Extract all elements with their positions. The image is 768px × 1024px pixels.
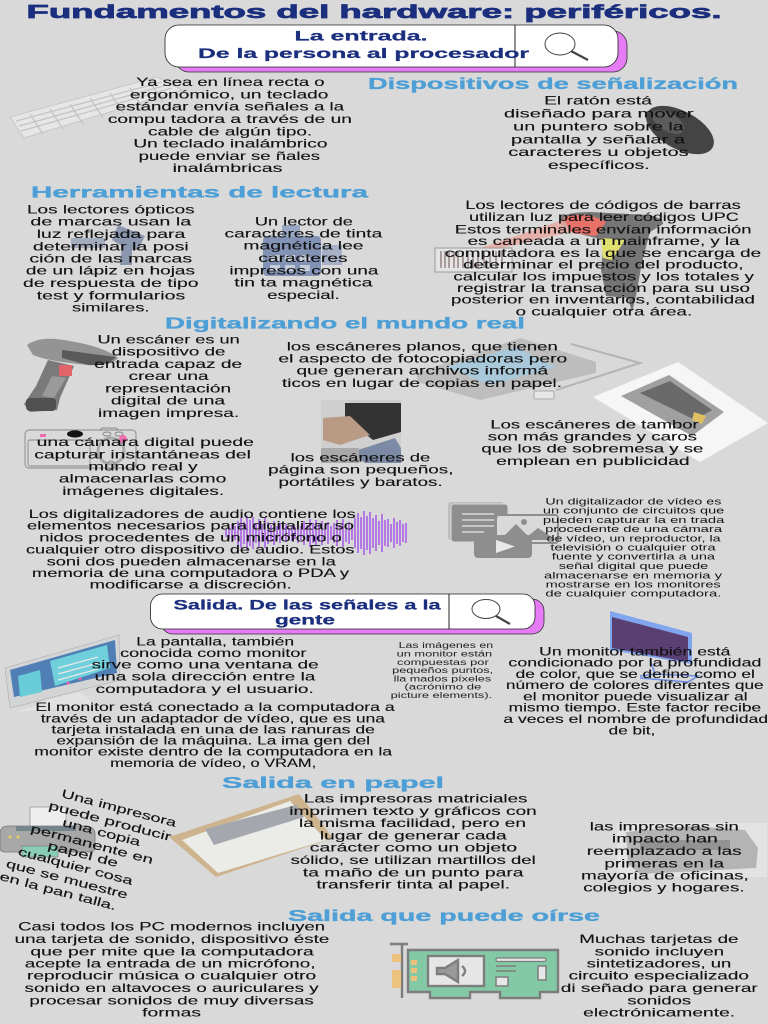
- text: teclado: puede enviar se ñales: [139, 149, 320, 163]
- text: impresora, rotated: papel de: [46, 838, 120, 870]
- text: impresoras matriciales: imprimen texto y gráficos con: [289, 804, 537, 818]
- text: lector de tinta magnética: magnética lee: [243, 239, 364, 253]
- text: digitalizador de vídeo: señal digital que puede: [559, 561, 708, 571]
- text: impresora, rotated: [0, 786, 178, 913]
- text: pantalla: sirve como una ventana de: [92, 657, 319, 671]
- text: impresoras matriciales: ta maño de un punto para: [303, 865, 524, 879]
- text: escáner: dispositivo de: [112, 345, 226, 359]
- text: impresoras sin impacto: las impresoras sin: [590, 819, 739, 833]
- text: digitalizador de vídeo: de vídeo, un reproductor, la: [547, 533, 722, 543]
- text: tarjeta de sonido: que per mite que la computadora: [30, 944, 314, 958]
- image: mouse: [638, 96, 722, 164]
- icon: magnifier: [472, 600, 510, 624]
- text: escáneres planos: los escáneres planos, que tienen: [287, 339, 558, 353]
- text: monitor conectado: monitor existe dentro de la computadora en la: [34, 745, 393, 759]
- image: barcode scanner: [435, 212, 663, 312]
- text: digitalizador de vídeo: televisión o cualquier otra: [550, 542, 717, 552]
- text: lector de tinta magnética: caracteres: [258, 251, 348, 265]
- text: profundidad de color: [503, 644, 768, 737]
- text: ratón: caracteres u objetos: [508, 145, 689, 159]
- text: píxeles: Las imágenes en: [399, 641, 493, 650]
- text: digitalizador de vídeo: [543, 496, 726, 599]
- text: escáner: representación: [105, 381, 231, 395]
- text: tarjeta de sonido: Casi todos los PC modernos incluyen: [18, 920, 325, 934]
- text: teclado: cable de algún tipo.: [148, 124, 312, 138]
- text: lectores ópticos: [23, 202, 199, 315]
- text: píxeles: compuestas por: [397, 658, 489, 667]
- text: impresoras matriciales: la misma facilidad, pero en: [299, 816, 526, 830]
- image: handheld scanner: [24, 339, 118, 412]
- text: teclado: Un teclado inalámbrico: [133, 137, 328, 151]
- text: profundidad de color: de bit,: [609, 723, 655, 737]
- text: cámara digital: mundo real y: [88, 459, 198, 473]
- text: profundidad de color: número de colores diferentes que: [506, 678, 764, 692]
- image: desktop monitor: [5, 635, 120, 712]
- banner: la entrada: La entrada.: [294, 28, 428, 44]
- image: page scanner photo: [321, 400, 401, 463]
- text: cámara digital: [34, 435, 255, 498]
- text: pantalla: La pantalla, también: [136, 634, 294, 648]
- text: tarjeta de sonido: reproducir música o cualquier otro: [27, 969, 317, 983]
- text: digitalizadores de audio: nidos procedentes de un micrófono o: [39, 531, 342, 545]
- text: códigos de barras: [445, 198, 762, 318]
- text: digitalizador de vídeo: procedente de una cámara: [545, 524, 724, 534]
- text: escáneres planos: que generan archivos informá: [297, 364, 549, 378]
- text: escáner: imagen impresa.: [98, 406, 239, 420]
- text: códigos de barras: computadora es la que se encarga de: [445, 246, 762, 260]
- text: tarjeta de sonido: sonido en altavoces o auriculares y: [25, 981, 319, 995]
- text: cámara digital: imágenes digitales.: [62, 484, 224, 498]
- text: lector de tinta magnética: [224, 214, 383, 302]
- text: píxeles: picture elements).: [391, 691, 492, 700]
- icon: video files: [448, 502, 558, 558]
- text: píxeles: pequeños puntos,: [392, 666, 493, 675]
- text: ratón: específicos.: [548, 158, 650, 172]
- text: pantalla: computadora y el usuario.: [96, 682, 314, 696]
- text: escáner: Un escáner es un: [98, 332, 240, 346]
- text: escáneres planos: el aspecto de fotocopiadoras pero: [278, 351, 568, 365]
- text: sintetizadores: di señado para generar: [561, 981, 758, 995]
- text: sintetizadores: circuito especializado: [569, 969, 750, 983]
- text: digitalizador de vídeo: de cualquier computadora.: [545, 589, 721, 599]
- text: escáneres de página: portátiles y baratos.: [278, 475, 443, 489]
- text: impresora, rotated: puede producir: [47, 798, 173, 844]
- text: escáneres de tambor: [481, 417, 704, 468]
- text: cámara digital: capturar instantáneas del: [34, 447, 251, 461]
- text: cámara digital: una cámara digital puede: [37, 435, 255, 449]
- text: impresoras sin impacto: primeras en la: [604, 856, 725, 870]
- text: tarjeta de sonido: acepte la entrada de un micrófono,: [25, 956, 315, 970]
- text: impresoras matriciales: transferir tinta al papel.: [316, 878, 510, 892]
- text: ratón: [504, 94, 694, 172]
- text: lector de tinta magnética: especial.: [267, 288, 340, 302]
- text: impresoras sin impacto: colegios y hogares.: [583, 881, 745, 895]
- text: píxeles: lla mados píxeles: [394, 674, 491, 683]
- text: lectores ópticos: determinar la posi: [33, 239, 189, 253]
- icon: sound card: [390, 944, 558, 998]
- text: lector de tinta magnética: Un lector de: [255, 214, 354, 228]
- text: lectores ópticos: Los lectores ópticos: [27, 202, 195, 216]
- text: cámara digital: almacenarlas como: [59, 472, 227, 486]
- text: impresoras matriciales: Las impresoras matriciales: [304, 792, 528, 806]
- text: teclado: [108, 75, 352, 175]
- text: monitor conectado: expansión de la máquina. La ima gen del: [56, 734, 370, 748]
- text: sintetizadores: sonido incluyen: [595, 944, 724, 958]
- text: impresoras sin impacto: impacto han: [612, 832, 718, 846]
- heading: salida que puede oírse: Salida que puede oírse: [288, 908, 600, 925]
- text: ratón: pantalla y señalar a: [511, 132, 686, 146]
- text: escáneres de tambor: que los de sobremesa y se: [481, 442, 704, 456]
- icon: optical mark reader: [71, 225, 145, 265]
- text: escáneres de tambor: emplean en publicidad: [496, 454, 690, 468]
- text: impresoras matriciales: carácter como un objeto: [310, 841, 518, 855]
- text: tarjeta de sonido: [15, 920, 330, 1020]
- icon: purple monitor: [610, 611, 698, 682]
- text: pantalla: una sola dirección entre la: [95, 670, 316, 684]
- text: impresoras matriciales: [289, 792, 537, 892]
- text: profundidad de color: Un monitor también está: [539, 644, 731, 658]
- text: lector de tinta magnética: caracteres de tinta: [224, 226, 383, 240]
- image: dot matrix printer photo: [169, 794, 333, 877]
- heading: digitalizando el mundo real: Digitalizando el mundo real: [165, 316, 525, 332]
- heading: salida en papel: Salida en papel: [222, 775, 444, 792]
- text: lectores ópticos: ción de las marcas: [29, 252, 192, 266]
- text: digitalizadores de audio: elementos necesarios para digitalizar so: [27, 519, 355, 533]
- text: impresora, rotated: en la pan talla.: [0, 869, 118, 913]
- text: códigos de barras: registrar la transacción para su uso: [457, 281, 751, 295]
- image: inkjet printer: [617, 823, 767, 877]
- text: ratón: diseñado para mover: [504, 107, 694, 121]
- text: lectores ópticos: de un lápiz en hojas: [26, 264, 195, 278]
- text: digitalizadores de audio: Los digitalizadores de audio contiene los: [29, 507, 356, 521]
- banner: salida: Salida. De las señales a la: [174, 598, 441, 612]
- icon: magnetic ink reader: [263, 225, 342, 276]
- heading: dispositivos de señalización: Dispositivos de señalización: [368, 76, 738, 93]
- text: códigos de barras: utilizan luz para leer códigos UPC: [469, 210, 739, 224]
- text: impresoras matriciales: lugar de generar cada: [320, 828, 507, 842]
- text: tarjeta de sonido: formas: [142, 1006, 201, 1020]
- text: digitalizadores de audio: cualquier otro dispositivo de audio. Estos: [26, 542, 355, 556]
- text: ratón: El ratón está: [544, 94, 653, 108]
- text: códigos de barras: es caneada a un mainframe, y la: [468, 234, 740, 248]
- text: códigos de barras: o cualquier otra área.: [516, 304, 692, 318]
- text: monitor conectado: memoria de vídeo, o VRAM,: [110, 756, 316, 770]
- banner: la entrada: De la persona al procesador: [198, 46, 530, 61]
- text: lectores ópticos: de respuesta de tipo: [23, 276, 199, 290]
- text: impresora, rotated: una copia: [61, 815, 143, 849]
- text: tarjeta de sonido: procesar sonidos de muy diversas: [29, 993, 314, 1007]
- text: lector de tinta magnética: tin ta magnética: [234, 276, 373, 290]
- text: monitor conectado: tarjeta instalada en una de las ranuras de: [51, 722, 376, 736]
- text: sintetizadores: Muchas tarjetas de: [579, 932, 739, 946]
- text: profundidad de color: de color, que se define como el: [516, 667, 755, 681]
- text: pantalla: [92, 634, 319, 696]
- text: píxeles: [391, 641, 493, 700]
- text: códigos de barras: posterior en inventarios, contabilidad: [451, 293, 755, 307]
- text: sintetizadores: [561, 932, 758, 1020]
- text: digitalizadores de audio: [26, 507, 356, 592]
- text: lectores ópticos: test y formularios: [37, 288, 185, 302]
- text: lectores ópticos: similares.: [72, 301, 150, 315]
- title: Fundamentos del hardware: periféricos.: [26, 1, 722, 22]
- text: escáneres de tambor: Los escáneres de tambor: [490, 417, 699, 431]
- text: monitor conectado: través de un adaptador de vídeo, que es una: [41, 711, 385, 725]
- text: impresoras matriciales: sólido, se utilizan martillos del: [291, 853, 536, 867]
- text: impresora, rotated: que se muestre: [5, 857, 130, 902]
- text: impresora, rotated: permanente en: [29, 821, 155, 867]
- text: códigos de barras: Los lectores de códigos de barras: [465, 198, 741, 212]
- text: ratón: un puntero sobre la: [513, 119, 685, 133]
- text: escáner: crear una: [129, 369, 209, 383]
- text: escáner: digital de una: [111, 394, 226, 408]
- text: escáneres de tambor: son más grandes y caros: [488, 430, 697, 444]
- text: digitalizadores de audio: modificarse a discreción.: [90, 578, 292, 592]
- text: teclado: estándar envía señales a la: [116, 100, 345, 114]
- text: teclado: Ya sea en línea recta o: [136, 75, 325, 89]
- text: escáner: [94, 332, 243, 420]
- text: digitalizador de vídeo: pueden capturar la en trada: [543, 515, 726, 525]
- text: impresoras sin impacto: [581, 819, 749, 895]
- text: monitor conectado: [34, 700, 395, 770]
- text: digitalizador de vídeo: mostrarse en los monitores: [546, 579, 721, 589]
- image: keyboard: [10, 77, 182, 138]
- text: códigos de barras: Estos terminales envían información: [455, 222, 752, 236]
- text: digitalizadores de audio: soni dos pueden almacenarse en la: [47, 554, 336, 568]
- text: píxeles: (acrónimo de: [404, 683, 482, 692]
- text: teclado: compu tadora a través de un: [108, 112, 352, 126]
- icon: audio waveform: [226, 511, 406, 555]
- text: lector de tinta magnética: impresos con una: [229, 263, 379, 277]
- text: impresoras sin impacto: reemplazado a las: [587, 844, 742, 858]
- text: escáneres planos: ticos en lugar de copias en papel.: [282, 376, 562, 390]
- text: pantalla: conocida como monitor: [120, 646, 307, 660]
- text: tarjeta de sonido: una tarjeta de sonido, dispositivo éste: [15, 932, 330, 946]
- banner: la entrada: [165, 25, 627, 72]
- text: sintetizadores: sintetizadores, un: [587, 956, 731, 970]
- text: teclado: ergonómico, un teclado: [130, 87, 329, 101]
- text: escáner: entrada capaz de: [94, 357, 243, 371]
- text: digitalizadores de audio: memoria de una computadora o PDA y: [32, 566, 349, 580]
- text: sintetizadores: sonidos: [627, 993, 691, 1007]
- text: profundidad de color: el monitor puede visualizar al: [523, 689, 748, 703]
- text: digitalizador de vídeo: un conjunto de circuitos que: [543, 506, 724, 516]
- text: impresoras sin impacto: mayoría de oficinas,: [581, 868, 749, 882]
- text: escáneres de página: [268, 450, 453, 489]
- image: flatbed scanner: [417, 338, 640, 400]
- text: monitor conectado: El monitor está conectado a la computadora a: [35, 700, 395, 714]
- text: escáneres de página: página son pequeños,: [268, 463, 453, 477]
- icon: digital camera: [25, 428, 136, 469]
- text: digitalizador de vídeo: Un digitalizador de vídeo es: [545, 496, 722, 506]
- text: escáneres planos: [278, 339, 568, 390]
- image: printer: [0, 807, 95, 857]
- text: lectores ópticos: luz reflejada para: [37, 227, 186, 241]
- text: digitalizador de vídeo: fuente y convertirla a una: [552, 552, 716, 562]
- text: sintetizadores: electrónicamente.: [583, 1006, 735, 1020]
- banner: salida: gente: [275, 612, 336, 628]
- text: lectores ópticos: de marcas usan la: [30, 215, 192, 229]
- icon: magnifier: [545, 33, 588, 60]
- text: profundidad de color: a veces el nombre de profundidad: [503, 712, 768, 726]
- text: profundidad de color: condicionado por la profundidad: [508, 656, 761, 670]
- text: píxeles: un monitor están: [397, 650, 492, 659]
- text: impresora, rotated: cualquier cosa: [17, 844, 135, 888]
- image: drum scanner: [593, 362, 768, 462]
- text: códigos de barras: calcular los impuestos y los totales y: [453, 269, 754, 283]
- text: escáneres de página: los escáneres de: [291, 450, 431, 464]
- text: impresora, rotated: Una impresora: [60, 786, 178, 830]
- text: profundidad de color: mismo tiempo. Este factor recibe: [509, 701, 762, 715]
- text: códigos de barras: determinar el precio del producto,: [463, 258, 744, 272]
- banner: salida: [150, 594, 544, 634]
- text: digitalizador de vídeo: almacenarse en memoria y: [544, 570, 723, 580]
- heading: herramientas de lectura: Herramientas de lectura: [31, 184, 368, 202]
- text: teclado: inalámbricas: [173, 161, 283, 175]
